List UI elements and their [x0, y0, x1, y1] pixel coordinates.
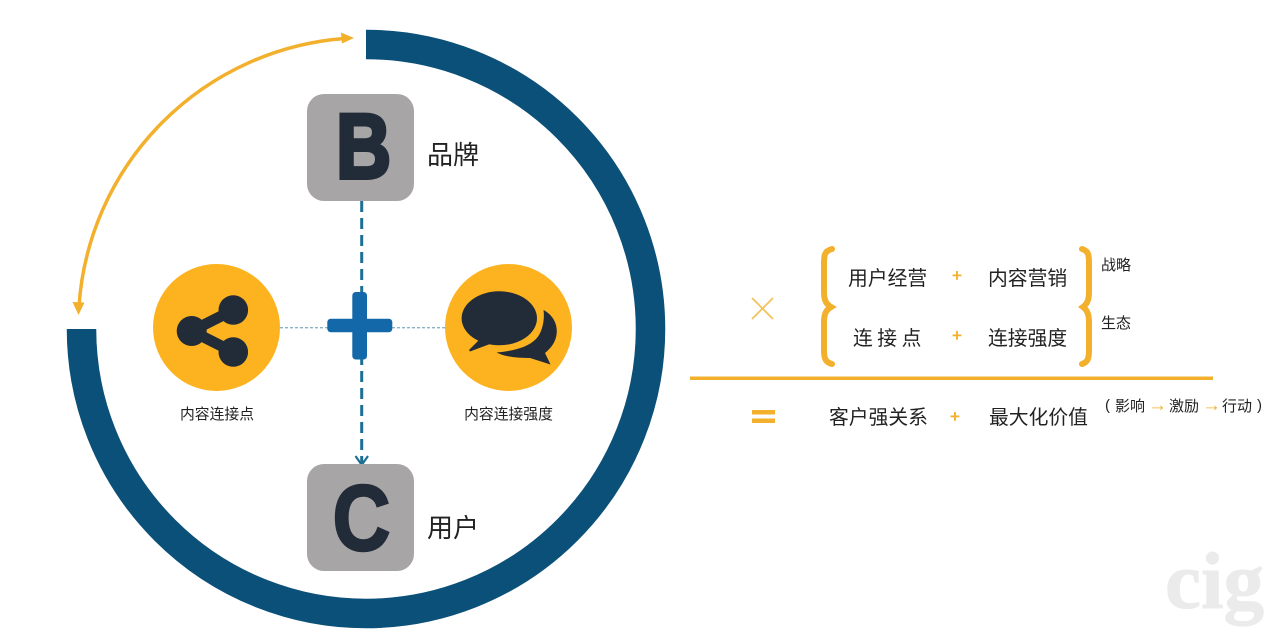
result row — [829, 407, 1088, 429]
label: content connection strength: 内容连接强度 — [464, 406, 553, 423]
B brand tile — [307, 94, 414, 201]
navy progress ring — [82, 44, 650, 614]
panel: formula — [690, 249, 1262, 429]
label: user: 用户 — [427, 513, 479, 543]
formula row one: + — [952, 266, 962, 285]
formula row one: 内容营销 — [988, 268, 1067, 290]
icon: multiply sign — [752, 298, 773, 319]
left brace — [824, 249, 832, 364]
formula row two: + — [952, 326, 962, 345]
result row: + — [950, 407, 960, 426]
label: brand: 品牌 — [427, 140, 479, 170]
icon: equals sign — [752, 410, 775, 423]
note: influence, motivate, act: 行动 — [1222, 398, 1252, 415]
note: influence, motivate, act: 影响 — [1115, 398, 1145, 415]
arrow: orange circular arrow — [72, 32, 354, 315]
note: influence, motivate, act — [1105, 395, 1262, 416]
label: content touchpoints: 内容连接点 — [180, 406, 254, 423]
note: influence, motivate, act: 激励 — [1169, 398, 1199, 415]
formula row two: 连接强度 — [988, 328, 1067, 350]
note: influence, motivate, act: → — [1202, 395, 1221, 416]
formula row one — [848, 266, 1067, 290]
formula row two — [853, 326, 1067, 350]
formula row one: 用户经营 — [848, 268, 927, 290]
C user tile — [307, 464, 414, 571]
note: influence, motivate, act: ( — [1105, 397, 1110, 414]
icon: share in orange circle — [153, 264, 280, 391]
note: influence, motivate, act: → — [1148, 395, 1167, 416]
dotted horizontal connector — [280, 327, 445, 329]
right brace — [1082, 249, 1089, 364]
result row: 客户强关系 — [829, 407, 928, 429]
icon: speech bubbles in orange circle — [445, 264, 572, 391]
label: ecosystem: 生态 — [1101, 315, 1131, 332]
watermark: cig: cig — [1165, 536, 1264, 626]
formula row two: 连接点 — [853, 328, 926, 350]
C user tile: C — [333, 466, 390, 570]
icon: central plus — [327, 292, 392, 360]
label: strategy: 战略 — [1101, 257, 1131, 274]
note: influence, motivate, act: ) — [1257, 397, 1262, 414]
result row: 最大化价值 — [989, 407, 1088, 429]
dashed vertical connector with arrow — [356, 201, 368, 465]
B brand tile: B — [336, 94, 391, 198]
panel: brand-user circle diagram — [72, 32, 650, 614]
fraction rule — [690, 376, 1213, 380]
